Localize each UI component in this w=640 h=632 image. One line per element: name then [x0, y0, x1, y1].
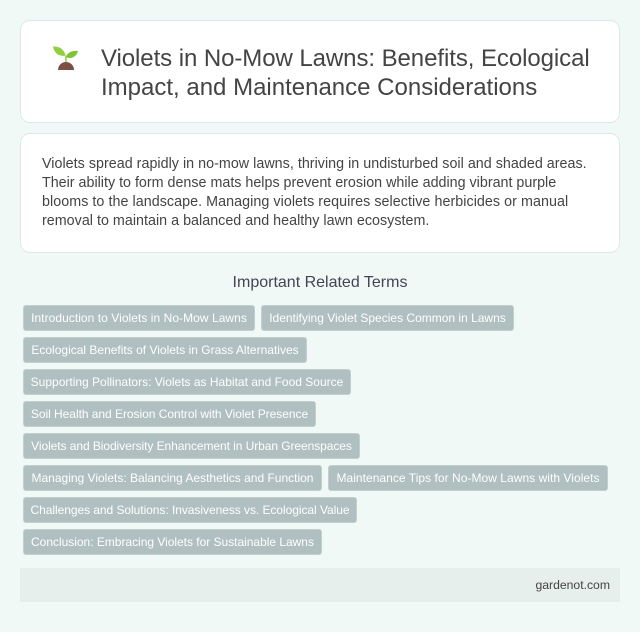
- tag list: [23, 305, 608, 555]
- icon: sprout: [53, 46, 78, 70]
- panel: description card: [20, 133, 620, 253]
- description text: Violets spread rapidly in no-mow lawns, thriving in undisturbed soil and shaded areas.: [42, 156, 587, 172]
- title: Violets in No-Mow Lawns: Benefits, Ecological: [101, 45, 590, 72]
- tag: [23, 401, 316, 427]
- panel: title card: [20, 20, 620, 123]
- tag: Soil Health and Erosion Control with Violet Presence: [31, 407, 308, 421]
- tag: Maintenance Tips for No-Mow Lawns with Violets: [336, 471, 600, 485]
- tag: Challenges and Solutions: Invasiveness vs. Ecological Value: [30, 503, 350, 517]
- tag: [23, 497, 357, 523]
- tag: [328, 465, 608, 491]
- tag: Introduction to Violets in No-Mow Lawns: [31, 311, 247, 325]
- title: [101, 45, 590, 101]
- footer source: gardenot.com: [535, 578, 610, 592]
- tag: Conclusion: Embracing Violets for Sustainable Lawns: [31, 535, 314, 549]
- description text: blooms to the landscape. Managing violets requires selective herbicides or manual: [42, 194, 568, 210]
- heading: related terms: Important Related Terms: [233, 274, 407, 291]
- footer bar: [20, 568, 620, 602]
- tag: [23, 433, 360, 459]
- description text: Their ability to form dense mats helps prevent erosion while adding vibrant purple: [42, 175, 556, 191]
- tag: Violets and Biodiversity Enhancement in Urban Greenspaces: [31, 439, 352, 453]
- title: Impact, and Maintenance Considerations: [101, 74, 537, 101]
- tag: [23, 337, 307, 363]
- tag: [23, 369, 351, 395]
- tag: Supporting Pollinators: Violets as Habitat and Food Source: [31, 375, 343, 389]
- description text: removal to maintain a balanced and healthy lawn ecosystem.: [42, 213, 429, 229]
- description text: [42, 156, 587, 229]
- tag: [23, 529, 322, 555]
- tag: Ecological Benefits of Violets in Grass Alternatives: [31, 343, 299, 357]
- tag: Identifying Violet Species Common in Lawns: [269, 311, 506, 325]
- tag: [23, 465, 322, 491]
- tag: Managing Violets: Balancing Aesthetics and Function: [32, 471, 313, 485]
- tag: [261, 305, 514, 331]
- tag: [23, 305, 255, 331]
